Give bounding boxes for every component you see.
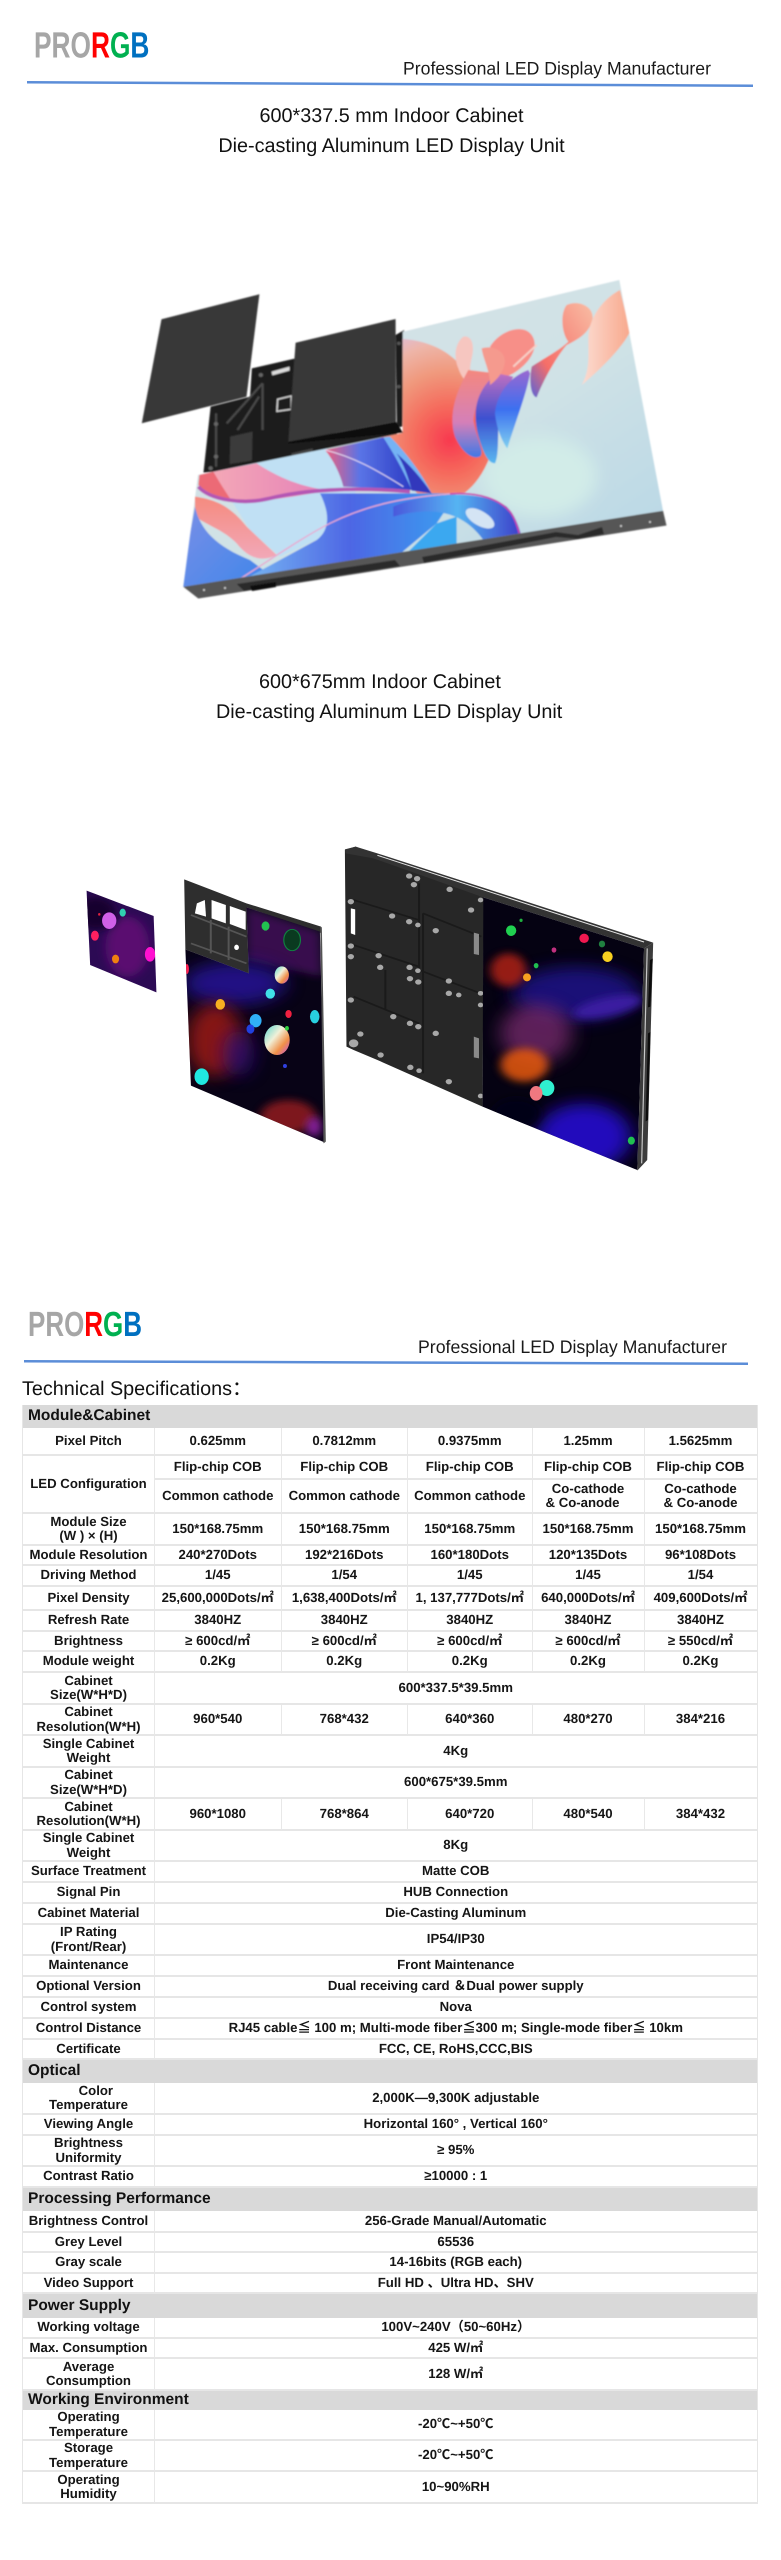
row: cabinet resolution 337.5: 768*432 bbox=[320, 1711, 369, 1726]
row: module size: 150*168.75mm bbox=[543, 1521, 633, 1536]
row: surface treatment bbox=[23, 1862, 757, 1883]
row: driving method: 1/45 bbox=[457, 1567, 483, 1582]
row: brightness control: Brightness Control bbox=[29, 2213, 148, 2228]
heading: 600*675 cabinet: Die-casting Aluminum LED Display Unit bbox=[216, 701, 563, 723]
row: brightness: ≥ 550cd/㎡ bbox=[668, 1633, 733, 1648]
row: driving method bbox=[23, 1566, 757, 1587]
row: average consumption: Consumption bbox=[46, 2373, 131, 2388]
row: average consumption: 128 W/㎡ bbox=[428, 2366, 483, 2381]
row: signal pin bbox=[23, 1883, 757, 1904]
row: color temperature: Temperature bbox=[49, 2097, 128, 2112]
row: module weight: Module weight bbox=[43, 1653, 134, 1668]
row: cabinet resolution 675: 480*540 bbox=[563, 1806, 613, 1821]
row: module weight bbox=[23, 1652, 757, 1673]
row: module resolution: 240*270Dots bbox=[179, 1547, 257, 1562]
cabinet bottom edge bbox=[183, 511, 667, 598]
row: certificate: Certificate bbox=[56, 2041, 121, 2056]
row: brightness: ≥ 600cd/㎡ bbox=[437, 1633, 502, 1648]
row: color temperature: Color bbox=[79, 2082, 113, 2098]
row: operating humidity bbox=[23, 2472, 756, 2504]
row: control distance: RJ45 cable≦ 100 m; Multi-mode fiber≦300 m; Single-mode fiber≦ 10km bbox=[229, 2020, 683, 2035]
module: right floating panel bbox=[288, 319, 403, 444]
row: storage temperature: -20℃~+50℃ bbox=[418, 2447, 494, 2462]
row: operating humidity: 10~90%RH bbox=[422, 2479, 490, 2494]
row: color temperature bbox=[23, 2082, 757, 2115]
row: optional version bbox=[23, 1977, 757, 1998]
row: pixel pitch: 1.25mm bbox=[563, 1433, 613, 1448]
row: gray scale: Gray scale bbox=[55, 2254, 122, 2269]
row: LED configuration cathode: Common cathode bbox=[414, 1488, 525, 1503]
row: brightness uniformity: Uniformity bbox=[56, 2150, 121, 2164]
row: pixel pitch: 0.9375mm bbox=[438, 1433, 502, 1448]
row: gray scale bbox=[23, 2253, 757, 2274]
row: single cabinet weight 337.5: Single Cabinet bbox=[43, 1736, 134, 1750]
row: LED configuration chip: Flip-chip COB bbox=[300, 1459, 388, 1474]
row: control system bbox=[23, 1998, 757, 2019]
row: module resolution: 192*216Dots bbox=[305, 1547, 383, 1562]
illustration: 600*675 cabinet exploded view bbox=[76, 847, 653, 1171]
row: module resolution: 160*180Dots bbox=[431, 1547, 509, 1562]
row: cabinet resolution 337.5: 640*360 bbox=[445, 1711, 494, 1726]
row: operating humidity: Operating bbox=[57, 2472, 120, 2486]
row: contrast ratio: Contrast Ratio bbox=[43, 2168, 134, 2183]
row: module size: 150*168.75mm bbox=[172, 1521, 263, 1536]
heading: 600*675 cabinet bbox=[216, 671, 563, 723]
row: refresh rate bbox=[23, 1611, 757, 1632]
row: gray scale: 14-16bits (RGB each) bbox=[389, 2254, 522, 2269]
row: max consumption: Max. Consumption bbox=[30, 2340, 147, 2355]
row: cabinet material: Die-Casting Aluminum bbox=[385, 1905, 526, 1920]
row: pixel pitch: 1.5625mm bbox=[669, 1433, 732, 1448]
row: maintenance bbox=[23, 1956, 757, 1977]
row: cabinet resolution 337.5: 480*270 bbox=[563, 1711, 613, 1726]
row: certificate bbox=[23, 2040, 757, 2060]
row: cabinet size 337.5: Size(W*H*D) bbox=[50, 1687, 127, 1702]
row: LED configuration cathode: Common cathode bbox=[162, 1488, 273, 1503]
row: max consumption: 425 W/㎡ bbox=[428, 2340, 483, 2355]
row: storage temperature: Storage bbox=[64, 2440, 113, 2455]
row: optional version: Dual receiving card ＆Dual power supply bbox=[328, 1978, 584, 1993]
row: viewing angle: Viewing Angle bbox=[44, 2116, 133, 2131]
row: brightness: Brightness bbox=[54, 1633, 123, 1648]
row: control system: Control system bbox=[40, 1999, 136, 2014]
row: driving method: 1/45 bbox=[205, 1567, 231, 1582]
row: LED configuration cathode bbox=[155, 1480, 757, 1514]
row: pixel density: 25,600,000Dots/㎡ bbox=[162, 1590, 274, 1605]
row: control distance: Control Distance bbox=[36, 2020, 141, 2035]
row: average consumption bbox=[23, 2358, 757, 2391]
row: IP rating: IP54/IP30 bbox=[427, 1931, 485, 1946]
row: brightness: ≥ 600cd/㎡ bbox=[312, 1633, 377, 1648]
row: contrast ratio bbox=[23, 2167, 757, 2188]
row: brightness control: 256-Grade Manual/Automatic bbox=[365, 2213, 547, 2228]
row: video support bbox=[23, 2274, 757, 2294]
row: refresh rate: 3840HZ bbox=[194, 1612, 241, 1627]
row: refresh rate: 3840HZ bbox=[565, 1612, 611, 1627]
row: IP rating bbox=[23, 1924, 757, 1956]
row: cabinet resolution 337.5: Resolution(W*H) bbox=[36, 1718, 141, 1734]
row: module size: 150*168.75mm bbox=[424, 1521, 515, 1536]
row: module resolution: Module Resolution bbox=[30, 1547, 147, 1562]
row: control distance bbox=[23, 2019, 757, 2040]
row: signal pin: HUB Connection bbox=[403, 1884, 508, 1899]
row: LED configuration chip: Flip-chip COB bbox=[544, 1459, 632, 1474]
row: module size: 150*168.75mm bbox=[655, 1521, 746, 1536]
cabinet back frame bbox=[203, 330, 404, 473]
row: grey level: Grey Level bbox=[55, 2234, 122, 2249]
row: operating temperature: -20℃~+50℃ bbox=[418, 2416, 494, 2431]
row: maintenance: Front Maintenance bbox=[397, 1957, 514, 1972]
row: module size: Module Size bbox=[50, 1514, 127, 1528]
row: maintenance: Maintenance bbox=[49, 1957, 128, 1972]
row: contrast ratio: ≥10000 : 1 bbox=[424, 2168, 487, 2183]
row: viewing angle bbox=[23, 2115, 757, 2136]
row: certificate: FCC, CE, RoHS,CCC,BIS bbox=[379, 2041, 533, 2056]
row: module weight: 0.2Kg bbox=[326, 1653, 362, 1668]
row: LED configuration cathode: Co-cathode bbox=[552, 1480, 624, 1496]
row: module size bbox=[23, 1514, 757, 1546]
row: cabinet resolution 675 bbox=[23, 1798, 757, 1831]
row: module size: (W ) × (H) bbox=[59, 1528, 118, 1543]
row: pixel pitch: Pixel Pitch bbox=[55, 1433, 122, 1448]
row: module resolution: 96*108Dots bbox=[665, 1547, 736, 1562]
row: brightness uniformity: ≥ 95% bbox=[437, 2142, 474, 2157]
row: LED configuration cathode: Common cathode bbox=[289, 1488, 400, 1503]
row: pixel density: 409,600Dots/㎡ bbox=[654, 1590, 747, 1605]
row: viewing angle: Horizontal 160° , Vertical 160° bbox=[364, 2116, 548, 2131]
row: brightness: ≥ 600cd/㎡ bbox=[185, 1633, 250, 1648]
row: module weight: 0.2Kg bbox=[200, 1653, 236, 1668]
section heading: power supply: Power Supply bbox=[28, 2297, 130, 2314]
row: single cabinet weight 675: Single Cabinet bbox=[43, 1830, 134, 1845]
row: cabinet resolution 337.5: 960*540 bbox=[193, 1711, 242, 1726]
row: cabinet resolution 337.5 bbox=[23, 1704, 757, 1736]
row: operating temperature: Operating bbox=[57, 2409, 120, 2424]
row: cabinet material: Cabinet Material bbox=[38, 1905, 139, 1920]
panel: small module bbox=[86, 890, 156, 992]
row: single cabinet weight 675 bbox=[23, 1830, 757, 1862]
row: surface treatment: Surface Treatment bbox=[31, 1863, 146, 1878]
row: working voltage: 100V~240V（50~60Hz） bbox=[381, 2319, 530, 2334]
tagline specifications header: Professional LED Display Manufacturer bbox=[418, 1337, 727, 1357]
row: operating humidity: Humidity bbox=[60, 2486, 117, 2501]
row: driving method: Driving Method bbox=[40, 1567, 136, 1582]
row: brightness control bbox=[23, 2211, 757, 2233]
row: pixel pitch: 0.7812mm bbox=[312, 1433, 376, 1448]
row: module resolution bbox=[23, 1546, 757, 1566]
row: cabinet size 675: Cabinet bbox=[64, 1767, 113, 1782]
row: average consumption: Average bbox=[63, 2358, 114, 2374]
row: cabinet size 337.5 bbox=[23, 1672, 757, 1705]
row: single cabinet weight 337.5: 4Kg bbox=[443, 1743, 468, 1758]
row: cabinet size 675: Size(W*H*D) bbox=[50, 1782, 127, 1796]
row: pixel density bbox=[23, 1587, 757, 1611]
row: refresh rate: 3840HZ bbox=[321, 1612, 368, 1627]
row: LED configuration chip: Flip-chip COB bbox=[657, 1459, 744, 1474]
row: refresh rate: 3840HZ bbox=[677, 1612, 724, 1627]
row: LED configuration cathode: & Co-anode bbox=[546, 1495, 620, 1510]
row: color temperature: 2,000K—9,300K adjustable bbox=[372, 2090, 539, 2105]
row: cabinet size 337.5: 600*337.5*39.5mm bbox=[399, 1680, 513, 1695]
row: IP rating: IP Rating bbox=[60, 1924, 117, 1939]
row: working voltage bbox=[23, 2318, 757, 2339]
row: pixel pitch bbox=[23, 1428, 757, 1456]
row: driving method: 1/45 bbox=[575, 1567, 601, 1582]
row: module size: 150*168.75mm bbox=[299, 1521, 390, 1536]
row: module weight: 0.2Kg bbox=[683, 1653, 718, 1668]
row: pixel density: 640,000Dots/㎡ bbox=[541, 1590, 635, 1605]
row: cabinet resolution 337.5: Cabinet bbox=[64, 1704, 113, 1719]
section heading: working environment: Working Environment bbox=[28, 2391, 189, 2408]
row: cabinet size 675 bbox=[23, 1767, 757, 1799]
section heading: module and cabinet: Module&Cabinet bbox=[28, 1407, 150, 1424]
row: LED configuration cathode: Co-cathode bbox=[664, 1480, 737, 1496]
row: refresh rate: Refresh Rate bbox=[48, 1612, 129, 1627]
row: control system: Nova bbox=[440, 1999, 472, 2014]
row: cabinet resolution 675: Cabinet bbox=[64, 1798, 113, 1814]
screen artwork bbox=[182, 280, 664, 588]
section heading: optical: Optical bbox=[28, 2062, 81, 2079]
row: storage temperature bbox=[23, 2441, 756, 2472]
row: surface treatment: Matte COB bbox=[422, 1863, 489, 1878]
row: signal pin: Signal Pin bbox=[57, 1884, 120, 1899]
row: LED configuration chip bbox=[23, 1456, 757, 1514]
row: grey level: 65536 bbox=[437, 2234, 474, 2249]
row: cabinet resolution 337.5: 384*216 bbox=[676, 1711, 725, 1726]
row: brightness bbox=[23, 1632, 757, 1652]
row: cabinet resolution 675: 640*720 bbox=[445, 1806, 494, 1821]
row: cabinet material bbox=[23, 1904, 757, 1925]
row: optional version: Optional Version bbox=[36, 1978, 141, 1993]
row: video support: Full HD 、Ultra HD、SHV bbox=[378, 2275, 534, 2290]
row: LED configuration cathode: & Co-anode bbox=[664, 1495, 738, 1510]
ribbon arc right side bbox=[393, 494, 522, 540]
heading: technical specifications: Technical Specifications： bbox=[22, 1378, 252, 1400]
heading: 600*337.5 cabinet bbox=[218, 105, 565, 157]
row: operating temperature bbox=[23, 2410, 756, 2441]
row: cabinet resolution 675: 384*432 bbox=[676, 1806, 725, 1821]
row: single cabinet weight 675: Weight bbox=[67, 1844, 110, 1860]
row: brightness: ≥ 600cd/㎡ bbox=[555, 1633, 621, 1648]
row: single cabinet weight 337.5: Weight bbox=[67, 1750, 110, 1765]
logo: PRORGB top: PRORGB bbox=[34, 24, 149, 66]
row: video support: Video Support bbox=[44, 2275, 133, 2290]
row: max consumption bbox=[23, 2339, 757, 2359]
row: IP rating: (Front/Rear) bbox=[51, 1938, 126, 1954]
specifications table bbox=[22, 1405, 758, 2504]
row: single cabinet weight 675: 8Kg bbox=[443, 1837, 468, 1852]
tagline top: Professional LED Display Manufacturer bbox=[403, 58, 711, 78]
row: pixel density: 1,638,400Dots/㎡ bbox=[292, 1590, 397, 1605]
heading: 600*337.5 cabinet: 600*337.5 mm Indoor Cabinet bbox=[260, 105, 524, 127]
lower ribbon artwork bbox=[180, 437, 457, 590]
module: left floating panel bbox=[142, 294, 259, 423]
row: cabinet resolution 675: 768*864 bbox=[320, 1806, 369, 1821]
row: module resolution: 120*135Dots bbox=[549, 1547, 627, 1562]
row: module weight: 0.2Kg bbox=[452, 1653, 488, 1668]
row: module weight: 0.2Kg bbox=[570, 1653, 606, 1668]
panel: cabinet rear and screen, right bbox=[345, 847, 653, 1171]
row: driving method: 1/54 bbox=[331, 1567, 357, 1582]
page artwork: headers and product illustrations bbox=[22, 32, 753, 1400]
row: brightness uniformity bbox=[23, 2135, 757, 2167]
row: brightness uniformity: Brightness bbox=[54, 2135, 123, 2150]
panel: cabinet with modules, middle bbox=[183, 879, 326, 1143]
row: grey level bbox=[23, 2233, 757, 2253]
upper floral artwork bbox=[380, 290, 630, 517]
row: cabinet resolution 675: Resolution(W*H) bbox=[36, 1813, 141, 1828]
row: cabinet resolution 675: 960*1080 bbox=[190, 1806, 246, 1821]
heading: 600*675 cabinet: 600*675mm Indoor Cabinet bbox=[259, 671, 501, 693]
row: cabinet size 675: 600*675*39.5mm bbox=[404, 1774, 507, 1789]
illustration: 600*337.5 cabinet with two modules bbox=[142, 270, 680, 600]
row: operating temperature: Temperature bbox=[49, 2424, 128, 2438]
row: LED configuration chip: Flip-chip COB bbox=[174, 1459, 262, 1474]
logo: PRORGB specifications header: PRORGB bbox=[28, 1305, 142, 1344]
row: pixel density: Pixel Density bbox=[47, 1590, 130, 1605]
row: driving method: 1/54 bbox=[688, 1567, 713, 1582]
row: storage temperature: Temperature bbox=[49, 2454, 128, 2470]
section heading: processing performance: Processing Performance bbox=[28, 2190, 211, 2207]
row: single cabinet weight 337.5 bbox=[23, 1736, 757, 1768]
heading: 600*337.5 cabinet: Die-casting Aluminum LED Display Unit bbox=[218, 135, 565, 157]
row: refresh rate: 3840HZ bbox=[446, 1612, 493, 1627]
row: working voltage: Working voltage bbox=[37, 2319, 140, 2334]
specifications table: LED Configuration bbox=[30, 1476, 147, 1491]
row: pixel pitch: 0.625mm bbox=[190, 1433, 246, 1448]
row: cabinet size 337.5: Cabinet bbox=[64, 1672, 113, 1688]
row: pixel density: 1, 137,777Dots/㎡ bbox=[416, 1590, 524, 1605]
row: LED configuration chip: Flip-chip COB bbox=[426, 1459, 514, 1474]
